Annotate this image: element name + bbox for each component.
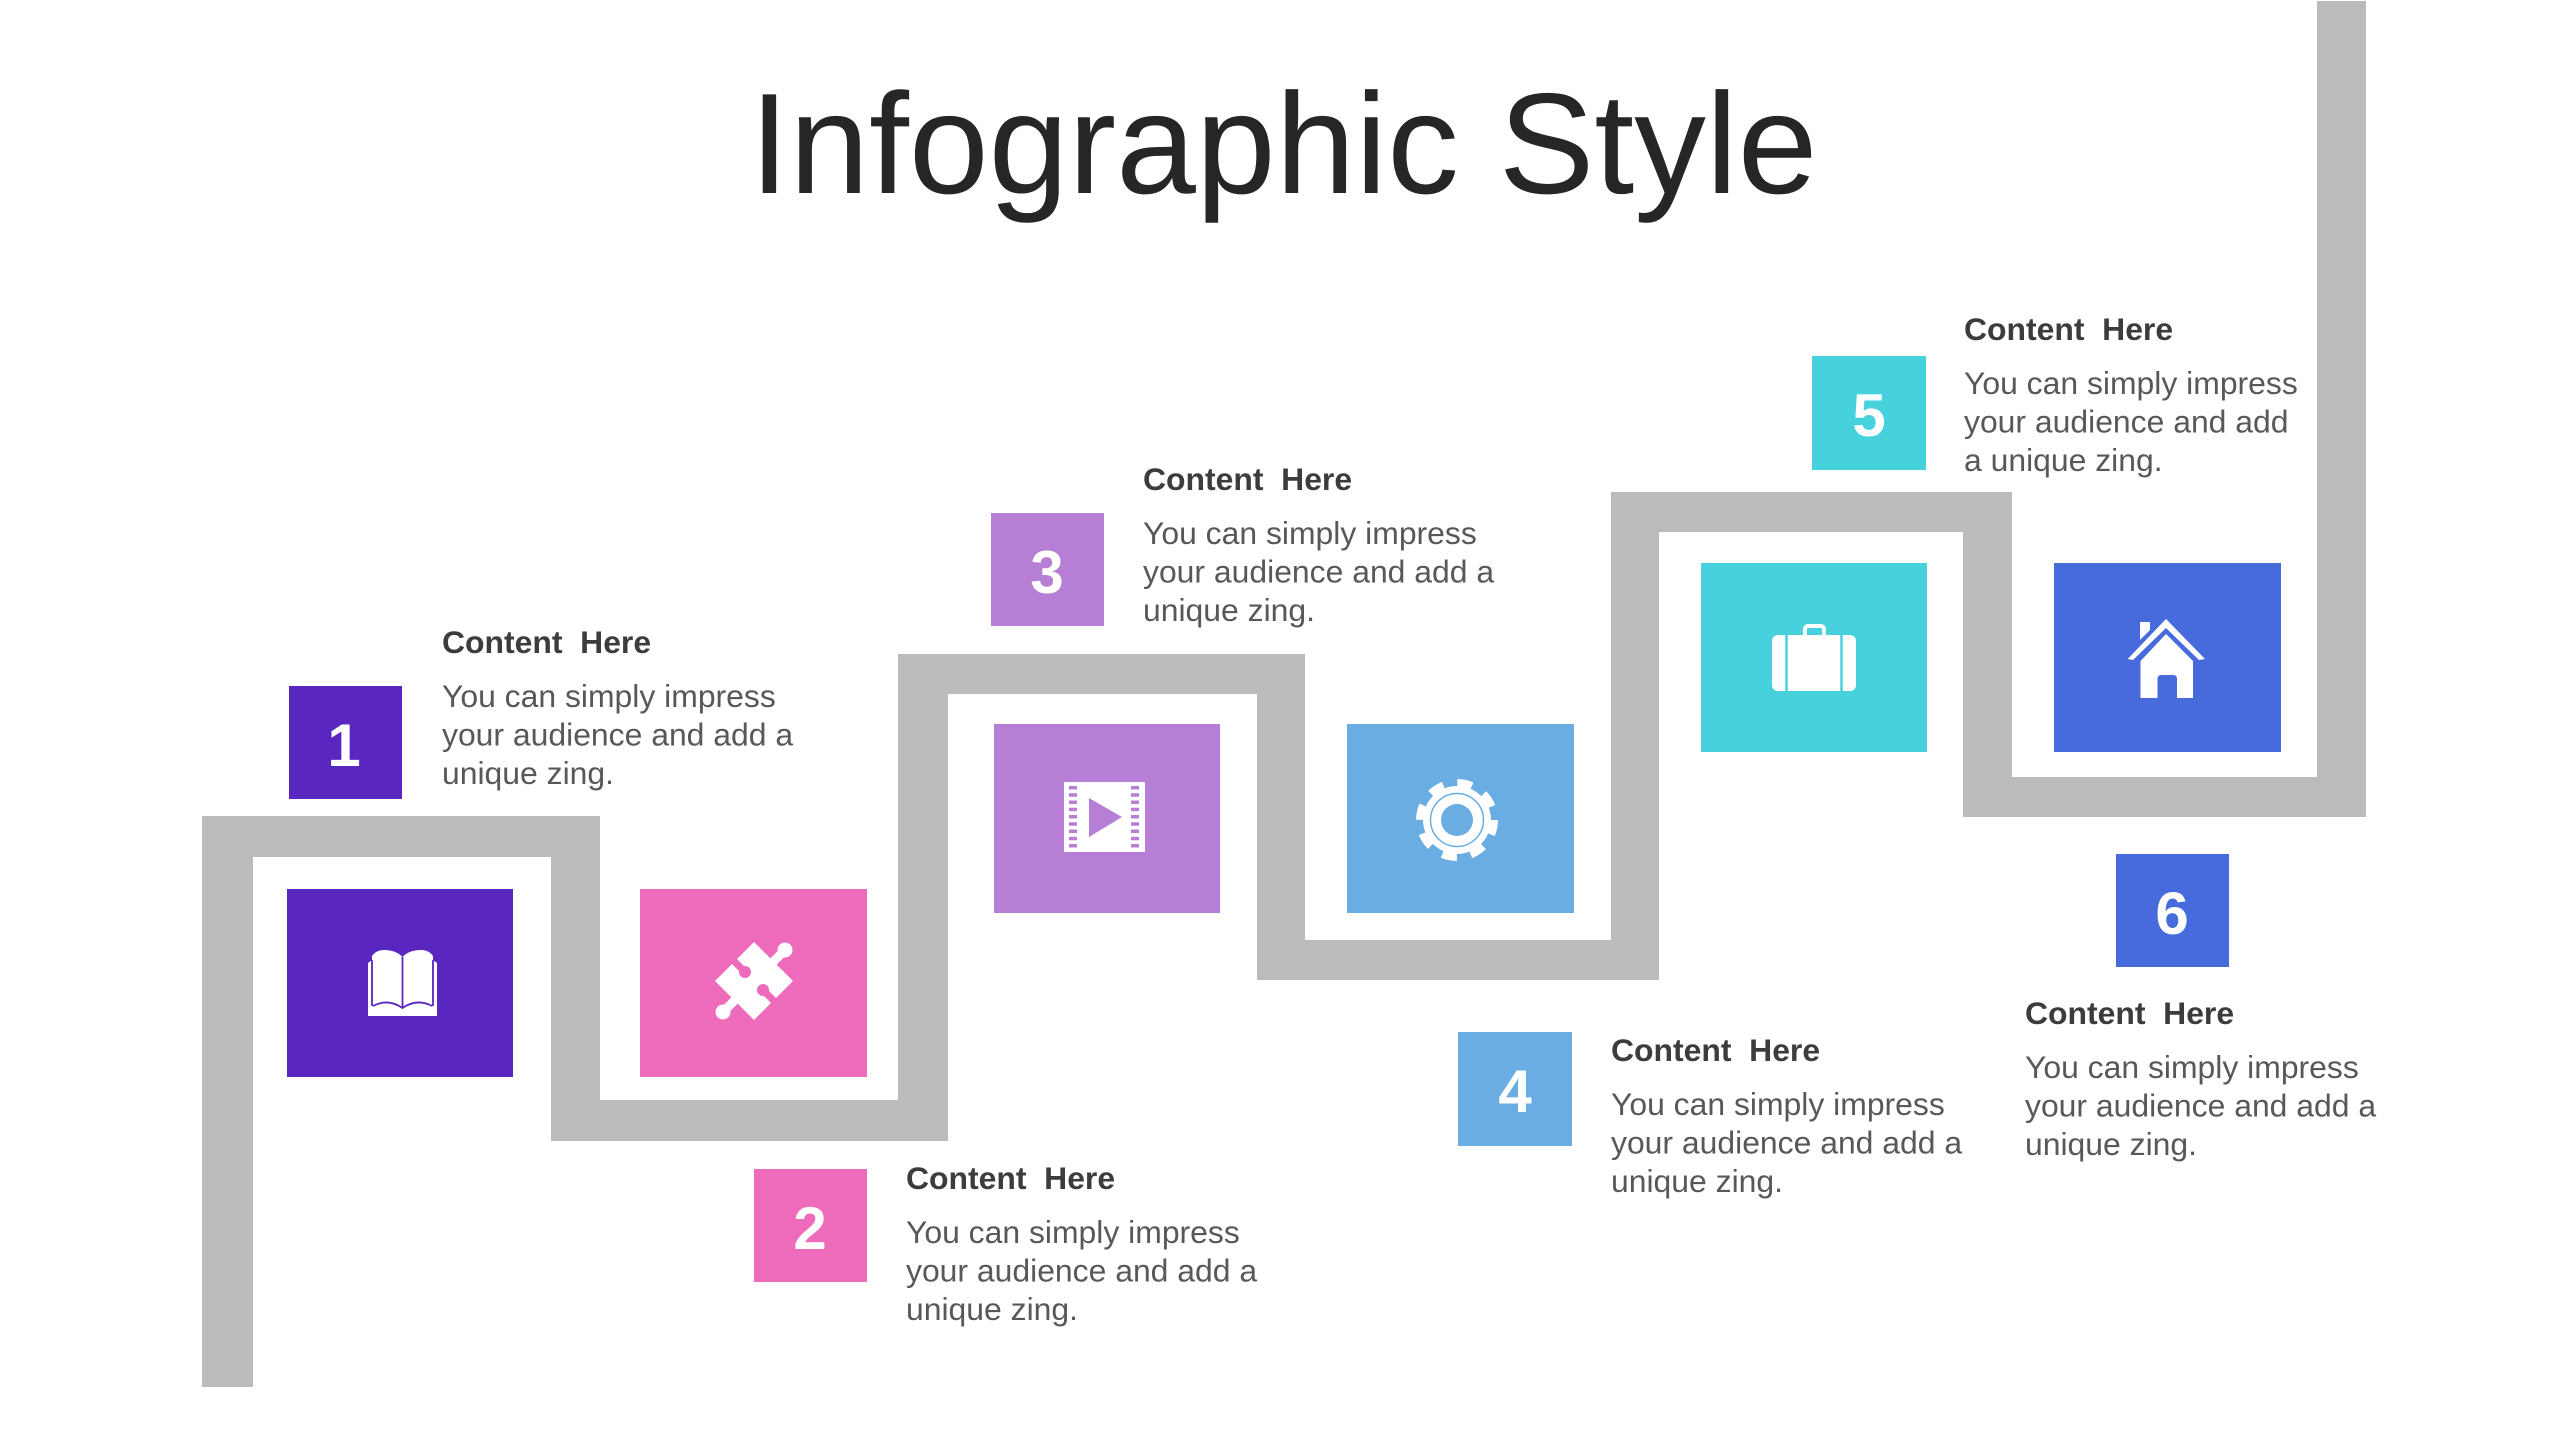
text block 2: You can simply impress	[906, 1214, 1240, 1250]
text block 3: Content Here	[1143, 461, 1352, 497]
number badge 5: 5	[1852, 382, 1886, 449]
number badge 2: 2	[793, 1195, 827, 1262]
number badge 4	[1458, 1032, 1572, 1146]
number badge 5	[1812, 356, 1926, 470]
text block 6: unique zing.	[2025, 1126, 2197, 1162]
number badge 1: 1	[327, 712, 361, 779]
text block 1: your audience and add a	[442, 716, 793, 752]
tile: step 3	[994, 724, 1220, 913]
text block 1: Content Here	[442, 624, 651, 660]
number badge 2	[754, 1169, 867, 1282]
tile: step 2	[640, 889, 867, 1077]
text block 2: Content Here	[906, 1160, 1115, 1196]
icon: briefcase	[1772, 626, 1856, 691]
title: Infographic Style	[750, 64, 1817, 224]
text block 5: a unique zing.	[1964, 442, 2163, 478]
text block 1	[442, 624, 793, 791]
text block 4: You can simply impress	[1611, 1086, 1945, 1122]
number badge 6: 6	[2155, 880, 2189, 947]
step 3 panel	[991, 461, 1494, 913]
text block 3: You can simply impress	[1143, 515, 1477, 551]
tile: step 1	[287, 889, 513, 1077]
number badge 6	[2116, 854, 2229, 967]
text block 1: unique zing.	[442, 755, 614, 791]
step 2 panel	[640, 889, 1257, 1327]
text block 6: your audience and add a	[2025, 1088, 2376, 1124]
text block 4: Content Here	[1611, 1032, 1820, 1068]
number badge 3: 3	[1030, 539, 1064, 606]
number badge 1	[289, 686, 402, 799]
icon: book	[368, 950, 437, 1016]
tile: step 4	[1347, 724, 1574, 913]
text block 3: unique zing.	[1143, 592, 1315, 628]
number badge 4: 4	[1498, 1058, 1532, 1125]
icon: film play	[1064, 782, 1145, 852]
text block 6: You can simply impress	[2025, 1049, 2359, 1085]
text block 3: your audience and add a	[1143, 554, 1494, 590]
icon: puzzle piece	[715, 942, 793, 1020]
number badge 3	[991, 513, 1104, 626]
step 5 panel	[1701, 311, 2298, 752]
text block 4	[1611, 1032, 1962, 1199]
step 4 panel	[1347, 724, 1962, 1199]
text block 5: Content Here	[1964, 311, 2173, 347]
text block 1: You can simply impress	[442, 678, 776, 714]
text block 4: your audience and add a	[1611, 1124, 1962, 1160]
text block 2	[906, 1160, 1257, 1327]
text block 6	[2025, 995, 2376, 1162]
text block 3	[1143, 461, 1494, 628]
icon: house	[2128, 619, 2205, 698]
step 1 panel	[287, 624, 793, 1077]
tile: step 5	[1701, 563, 1927, 752]
text block 6: Content Here	[2025, 995, 2234, 1031]
icon: gear	[1420, 783, 1494, 857]
tile: step 6	[2054, 563, 2281, 752]
text block 5: You can simply impress	[1964, 365, 2298, 401]
text block 2: unique zing.	[906, 1291, 1078, 1327]
text block 5	[1964, 311, 2298, 478]
text block 2: your audience and add a	[906, 1252, 1257, 1288]
text block 4: unique zing.	[1611, 1163, 1783, 1199]
step 6 panel	[2025, 563, 2376, 1162]
text block 5: your audience and add	[1964, 404, 2288, 440]
